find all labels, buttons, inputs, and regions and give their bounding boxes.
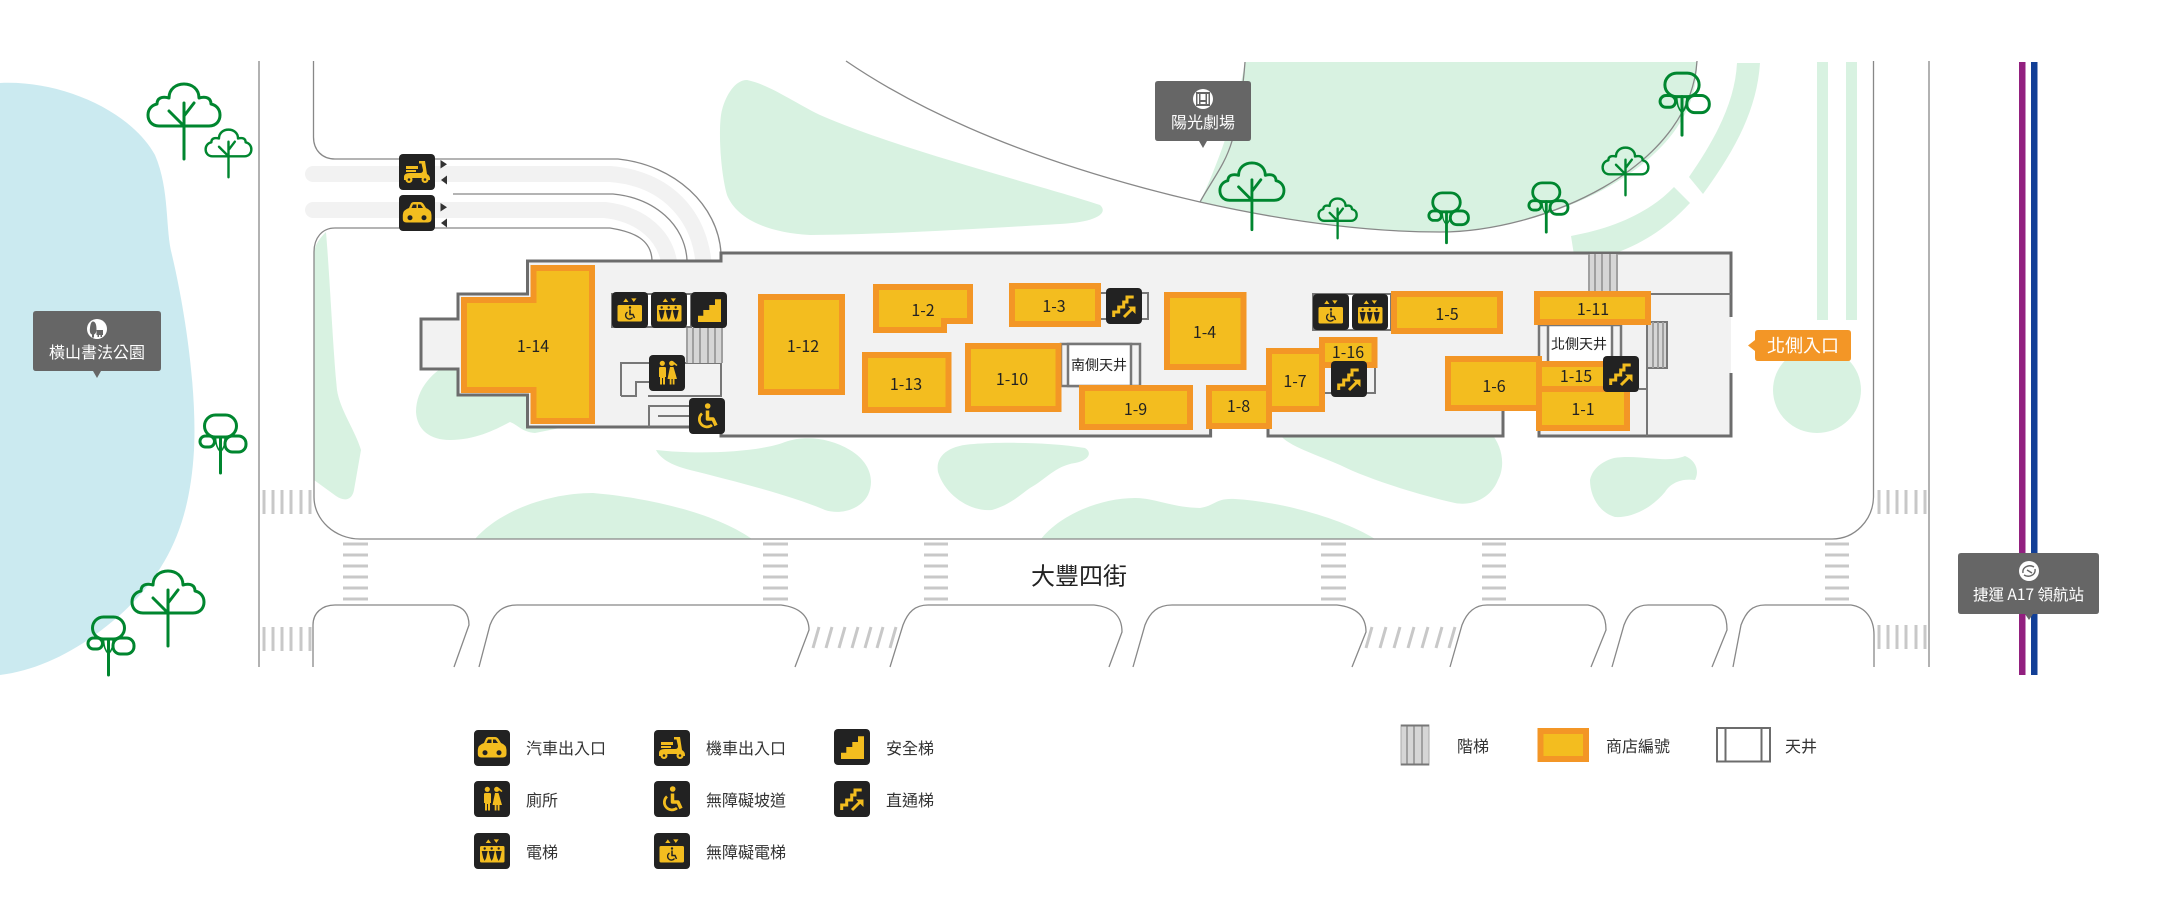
tree 1 [148,84,220,159]
callout: MRT A17 Linghang Station [1958,553,2099,620]
callout: north entrance: 北側入口 [1767,332,1839,358]
building outline [421,253,1731,436]
legend: accessible ramp: 無障礙坡道 [706,787,786,811]
callout: Hengshan Calligraphy Park: 橫山書法公園 [49,339,145,363]
shop 1-10 [968,346,1058,409]
elevator lobby south [612,294,691,327]
legend: car entrance: 汽車出入口 [526,735,606,759]
building floor [421,253,1731,436]
shop 1-1: 1-1 [1571,396,1595,420]
legend: restroom: 廁所 [526,787,558,811]
tree 8 [88,617,134,675]
south atrium [1061,344,1140,386]
shop 1-7: 1-7 [1283,368,1307,392]
interior walls [621,293,1731,436]
shop 1-10: 1-10 [996,366,1028,390]
legend: atrium: 天井 [1785,733,1817,757]
tree 6 [1603,148,1648,195]
icon: accessible elevator north [1313,294,1349,330]
legend: shop number: 商店編號 [1606,733,1670,757]
shop 1-12: 1-12 [787,333,819,357]
shop 1-2 [876,287,970,330]
legend: accessible ramp [654,781,786,817]
callout: Sunshine Theater [1155,81,1251,148]
shop 1-4: 1-4 [1193,319,1216,343]
legend: stairs [1401,725,1489,765]
green landscape areas [314,62,1861,539]
icon: accessible ramp [689,398,725,434]
shop 1-7 [1269,351,1322,409]
lake park area [0,83,194,675]
road curb lines [259,61,1929,667]
legend: scooter entrance [654,730,786,766]
tree 5 [1319,199,1357,238]
stairs north right [1647,322,1667,368]
shop 1-3: 1-3 [1042,293,1066,317]
shop 1-8 [1209,388,1269,426]
legend: restroom [474,781,558,817]
callout: Sunshine Theater: 陽光劇場 [1171,109,1235,133]
legend: accessible elevator: 無障礙電梯 [706,839,786,863]
callout: MRT A17 Linghang Station: 捷運 A17 領航站 [1973,583,2084,605]
legend: express stairs: 直通梯 [886,787,934,811]
legend: elevator: 電梯 [526,839,558,863]
icon: car entrance [399,195,435,231]
tree 3 [132,571,204,646]
shop 1-6: 1-6 [1482,373,1506,397]
shop 1-11: 1-11 [1577,296,1609,320]
legend: stairs: 階梯 [1457,733,1489,757]
icon: express stairs by 1-16 [1331,361,1367,397]
tree 7 [200,415,246,473]
legend: scooter entrance: 機車出入口 [706,735,786,759]
south atrium: 南側天井 [1071,355,1127,375]
icon: express stairs by 1-15 [1603,356,1639,392]
icon: accessible elevator south [612,292,648,328]
icon: elevator north [1352,294,1388,330]
shop 1-1 [1539,389,1627,428]
shop 1-6 [1448,359,1539,408]
shop 1-13 [865,355,948,410]
icon: restroom [649,355,685,391]
north atrium: 北側天井 [1551,334,1607,354]
shop 1-9 [1082,388,1190,427]
shop 1-14 [464,268,592,421]
callout: Hengshan Calligraphy Park [33,311,161,378]
shop 1-3 [1012,286,1098,324]
icon: safety stairs [691,292,727,328]
shop 1-15 [1539,363,1607,389]
metro lines [2019,62,2038,675]
shop 1-8: 1-8 [1227,393,1250,417]
legend: car entrance [474,730,606,766]
north atrium [1539,325,1621,365]
driveway bands [313,174,704,270]
crosswalks [264,490,1925,651]
elevator lobby north [1313,294,1391,330]
shop 1-4 [1167,295,1244,367]
tree 2 [206,130,251,177]
stairs north top [1589,254,1617,291]
shop 1-14: 1-14 [517,333,549,357]
tree 11 [1660,73,1709,135]
street name: 大豐四街 [1031,556,1127,592]
legend: safety stairs [834,729,934,765]
tree 10 [1529,183,1568,232]
shop 1-2: 1-2 [911,297,935,321]
legend: accessible elevator [654,833,786,869]
shop 1-16: 1-16 [1332,339,1364,363]
stairs south [687,328,722,363]
legend: atrium [1717,728,1817,762]
shop 1-5 [1394,294,1500,331]
shop 1-12 [761,297,842,392]
icon: express stairs by 1-3 [1106,288,1142,324]
tree 4 [1220,163,1284,230]
tree 9 [1429,193,1468,243]
icon: elevator south [651,292,687,328]
legend: shop number [1540,731,1670,759]
callout: north entrance [1748,330,1851,361]
shop 1-11 [1537,294,1648,322]
icon: scooter entrance [399,154,435,190]
shop 1-15: 1-15 [1560,363,1592,387]
direction arrows [440,160,447,228]
legend: express stairs [834,781,934,817]
shop 1-16 [1322,339,1374,365]
legend: elevator [474,833,558,869]
shop 1-13: 1-13 [890,371,922,395]
shop 1-9: 1-9 [1124,396,1147,420]
legend: safety stairs: 安全梯 [886,735,934,759]
shop 1-5: 1-5 [1435,301,1459,325]
